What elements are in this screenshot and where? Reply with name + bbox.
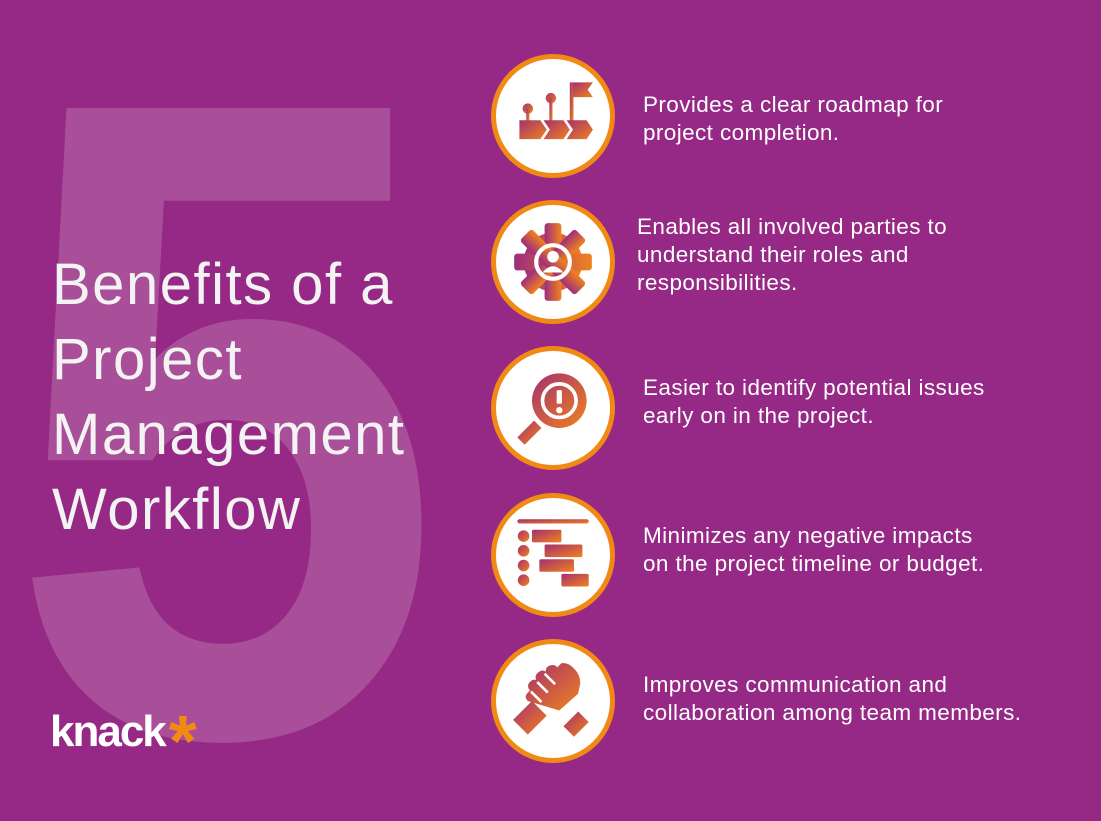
text 1: Provides a clear roadmap for	[643, 92, 943, 117]
text 3	[643, 375, 985, 428]
title: Management	[52, 402, 406, 467]
logo: knack*	[50, 702, 195, 782]
text 1: project completion.	[643, 120, 839, 145]
text 2: Enables all involved parties to	[637, 214, 947, 239]
icon: gear person	[491, 200, 615, 324]
title	[52, 252, 406, 542]
text 5: Improves communication and	[643, 672, 947, 697]
icon: handshake fist	[491, 639, 615, 763]
title: Project	[52, 327, 243, 392]
text 2	[637, 214, 947, 295]
text 4	[643, 523, 984, 576]
text 1	[643, 92, 943, 145]
text 5: collaboration among team members.	[643, 700, 1021, 725]
text 5	[643, 672, 1021, 725]
text 4: on the project timeline or budget.	[643, 551, 984, 576]
text 2: responsibilities.	[637, 270, 798, 295]
text 2: understand their roles and	[637, 242, 909, 267]
text 4: Minimizes any negative impacts	[643, 523, 973, 548]
text 3: Easier to identify potential issues	[643, 375, 985, 400]
text 3: early on in the project.	[643, 403, 874, 428]
title: Workflow	[52, 477, 301, 542]
icon: roadmap	[491, 54, 615, 178]
icon: magnifier	[491, 346, 615, 470]
icon: gantt	[491, 493, 615, 617]
title: Benefits of a	[52, 252, 394, 317]
